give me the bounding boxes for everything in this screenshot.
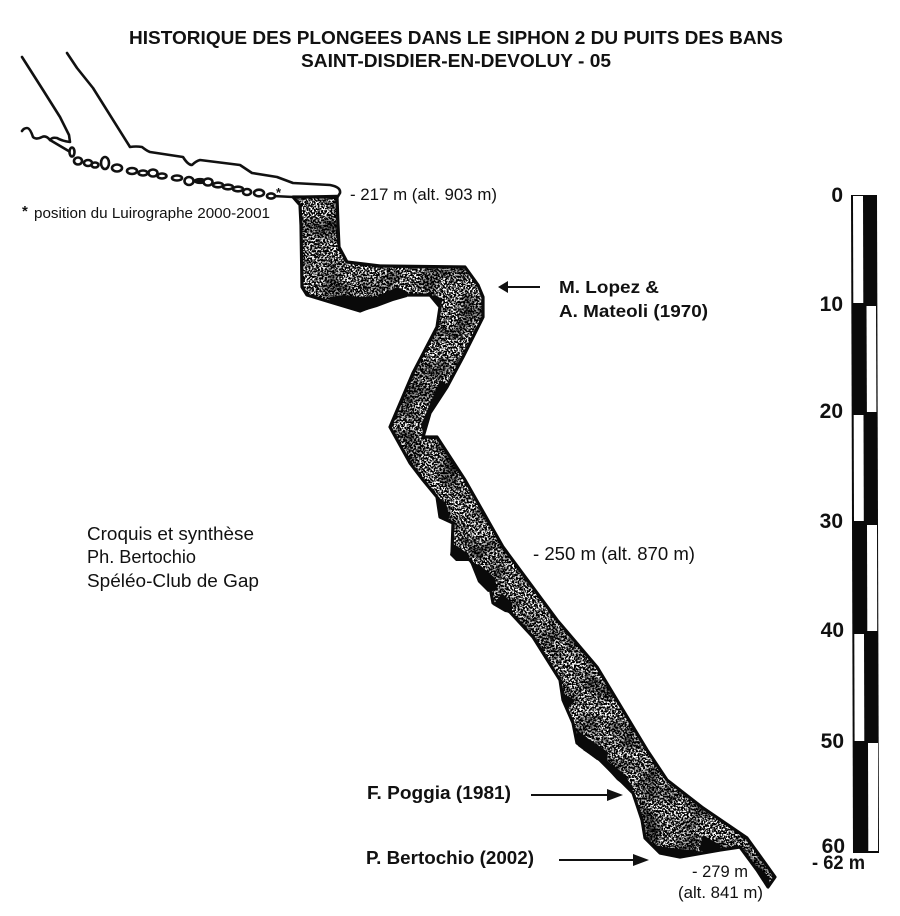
arrow: Poggia: [531, 789, 623, 801]
depth label -279 m: - 279 m: [692, 863, 748, 881]
depth label -279 m: [678, 863, 763, 902]
dark sediment deposits: [330, 287, 770, 887]
title: SAINT-DISDIER-EN-DEVOLUY - 05: [301, 51, 611, 71]
star marker: *: [276, 185, 282, 200]
title: [129, 28, 783, 71]
depth label -250 m: - 250 m (alt. 870 m): [533, 543, 695, 564]
depth scale bar: [851, 195, 879, 853]
depth scale labels: 50: [821, 730, 844, 753]
luirograph note: position du Luirographe 2000-2001: [34, 205, 270, 222]
credits text: [87, 523, 259, 591]
entrance gallery outline: [22, 53, 340, 198]
depth scale labels: 60: [822, 835, 845, 858]
arrow: Bertochio: [559, 854, 649, 866]
depth scale labels: [812, 184, 865, 874]
label: Lopez and Mateoli: A. Mateoli (1970): [559, 301, 708, 321]
depth scale labels: - 62 m: [812, 853, 865, 874]
arrow: Lopez and Mateoli: [498, 281, 540, 293]
depth scale labels: 40: [821, 619, 844, 642]
depth scale labels: 0: [831, 184, 843, 207]
label: Poggia: F. Poggia (1981): [367, 782, 511, 803]
credits text: Croquis et synthèse: [87, 523, 254, 544]
guide-line chain of ovals: [70, 148, 275, 199]
label: Lopez and Mateoli: M. Lopez &: [559, 277, 659, 297]
title: HISTORIQUE DES PLONGEES DANS LE SIPHON 2 DU PUITS DES BANS: [129, 28, 783, 48]
depth scale labels: 30: [820, 510, 843, 533]
credits text: Spéléo-Club de Gap: [87, 570, 259, 591]
depth label -217 m: - 217 m (alt. 903 m): [350, 185, 497, 204]
label: Bertochio: P. Bertochio (2002): [366, 847, 534, 868]
depth scale labels: 10: [820, 293, 843, 316]
siphon section: [285, 190, 780, 890]
depth label -279 m: (alt. 841 m): [678, 884, 763, 902]
label: Lopez and Mateoli: [559, 277, 708, 321]
credits text: Ph. Bertochio: [87, 546, 196, 567]
luirograph note: *: [22, 203, 28, 220]
depth scale labels: 20: [820, 400, 843, 423]
